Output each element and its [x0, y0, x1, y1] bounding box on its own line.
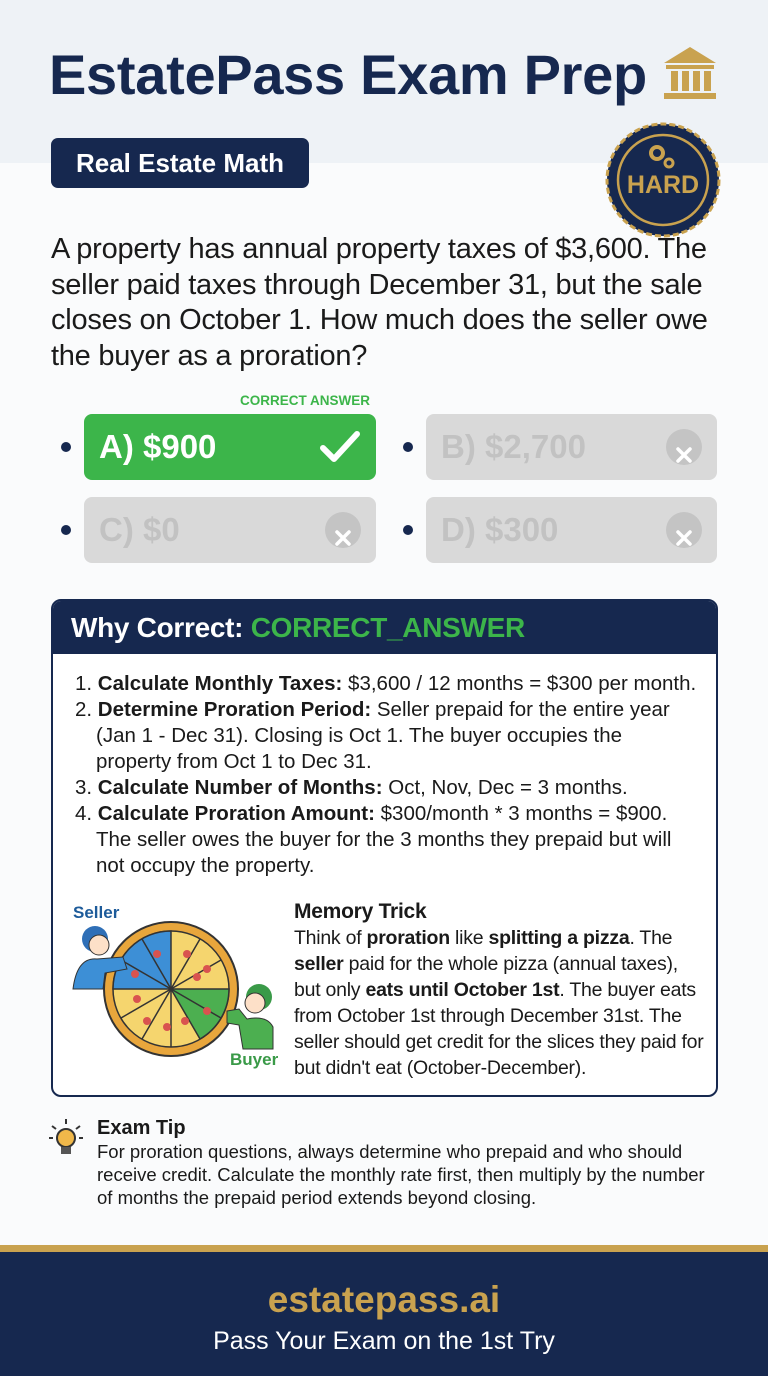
category badge: Real Estate Math	[76, 148, 284, 178]
panel header	[53, 601, 716, 654]
footer brand: estatepass.ai	[268, 1279, 500, 1320]
exam tip: For proration questions, always determine who prepaid and who should receive credit. Calculate the monthly rate first, then multiply by the number of months the prepaid period extends beyond closing.	[97, 1141, 705, 1208]
difficulty seal	[606, 122, 720, 238]
option B	[403, 414, 717, 480]
footer tagline: Pass Your Exam on the 1st Try	[213, 1327, 555, 1355]
option D	[403, 497, 717, 563]
question text: A property has annual property taxes of $3,600. The seller paid taxes through December 31, but the sale closes on October 1. How much does the seller owe the buyer as a proration?	[51, 233, 708, 372]
icon: bank building	[664, 47, 716, 99]
option C	[61, 497, 376, 563]
title: EstatePass Exam Prep	[49, 43, 647, 106]
option A correct	[61, 414, 376, 480]
header background	[0, 0, 768, 163]
option D: D) $300	[441, 511, 558, 548]
explanation steps: 3. Calculate Number of Months: Oct, Nov, Dec = 3 months.	[75, 776, 628, 799]
difficulty seal: HARD	[627, 171, 699, 199]
memory trick: Think of proration like splitting a pizza. The seller paid for the whole pizza (annual taxes), but only eats until October 1st. The buyer eats from October 1st through December 31st. The seller should get credit for the slices they paid for but didn't eat (October-December).	[294, 927, 703, 1079]
category badge	[51, 138, 309, 188]
panel header: Why Correct: CORRECT_ANSWER	[71, 612, 525, 643]
option C: C) $0	[99, 511, 180, 548]
panel: why correct	[51, 599, 718, 1097]
illustration: pizza seller buyer: Seller	[73, 903, 120, 922]
icon: lightbulb	[49, 1119, 83, 1154]
option B: B) $2,700	[441, 428, 586, 465]
memory trick: Memory Trick	[294, 900, 426, 923]
correct answer label: CORRECT ANSWER	[240, 393, 370, 408]
explanation steps: 1. Calculate Monthly Taxes: $3,600 / 12 months = $300 per month.	[75, 672, 696, 695]
explanation steps	[75, 672, 696, 877]
exam tip: Exam Tip	[97, 1117, 186, 1139]
explanation steps: 4. Calculate Proration Amount: $300/month * 3 months = $900. The seller owes the buyer for the 3 months they prepaid but will not occupy the property.	[75, 802, 671, 877]
option A correct: A) $900	[99, 428, 216, 465]
footer	[0, 1245, 768, 1376]
illustration: pizza seller buyer	[72, 903, 279, 1069]
illustration: pizza seller buyer: Buyer	[230, 1050, 279, 1069]
explanation steps: 2. Determine Proration Period: Seller prepaid for the entire year (Jan 1 - Dec 31). Closing is Oct 1. The buyer occupies the property from Oct 1 to Dec 31.	[75, 698, 670, 773]
